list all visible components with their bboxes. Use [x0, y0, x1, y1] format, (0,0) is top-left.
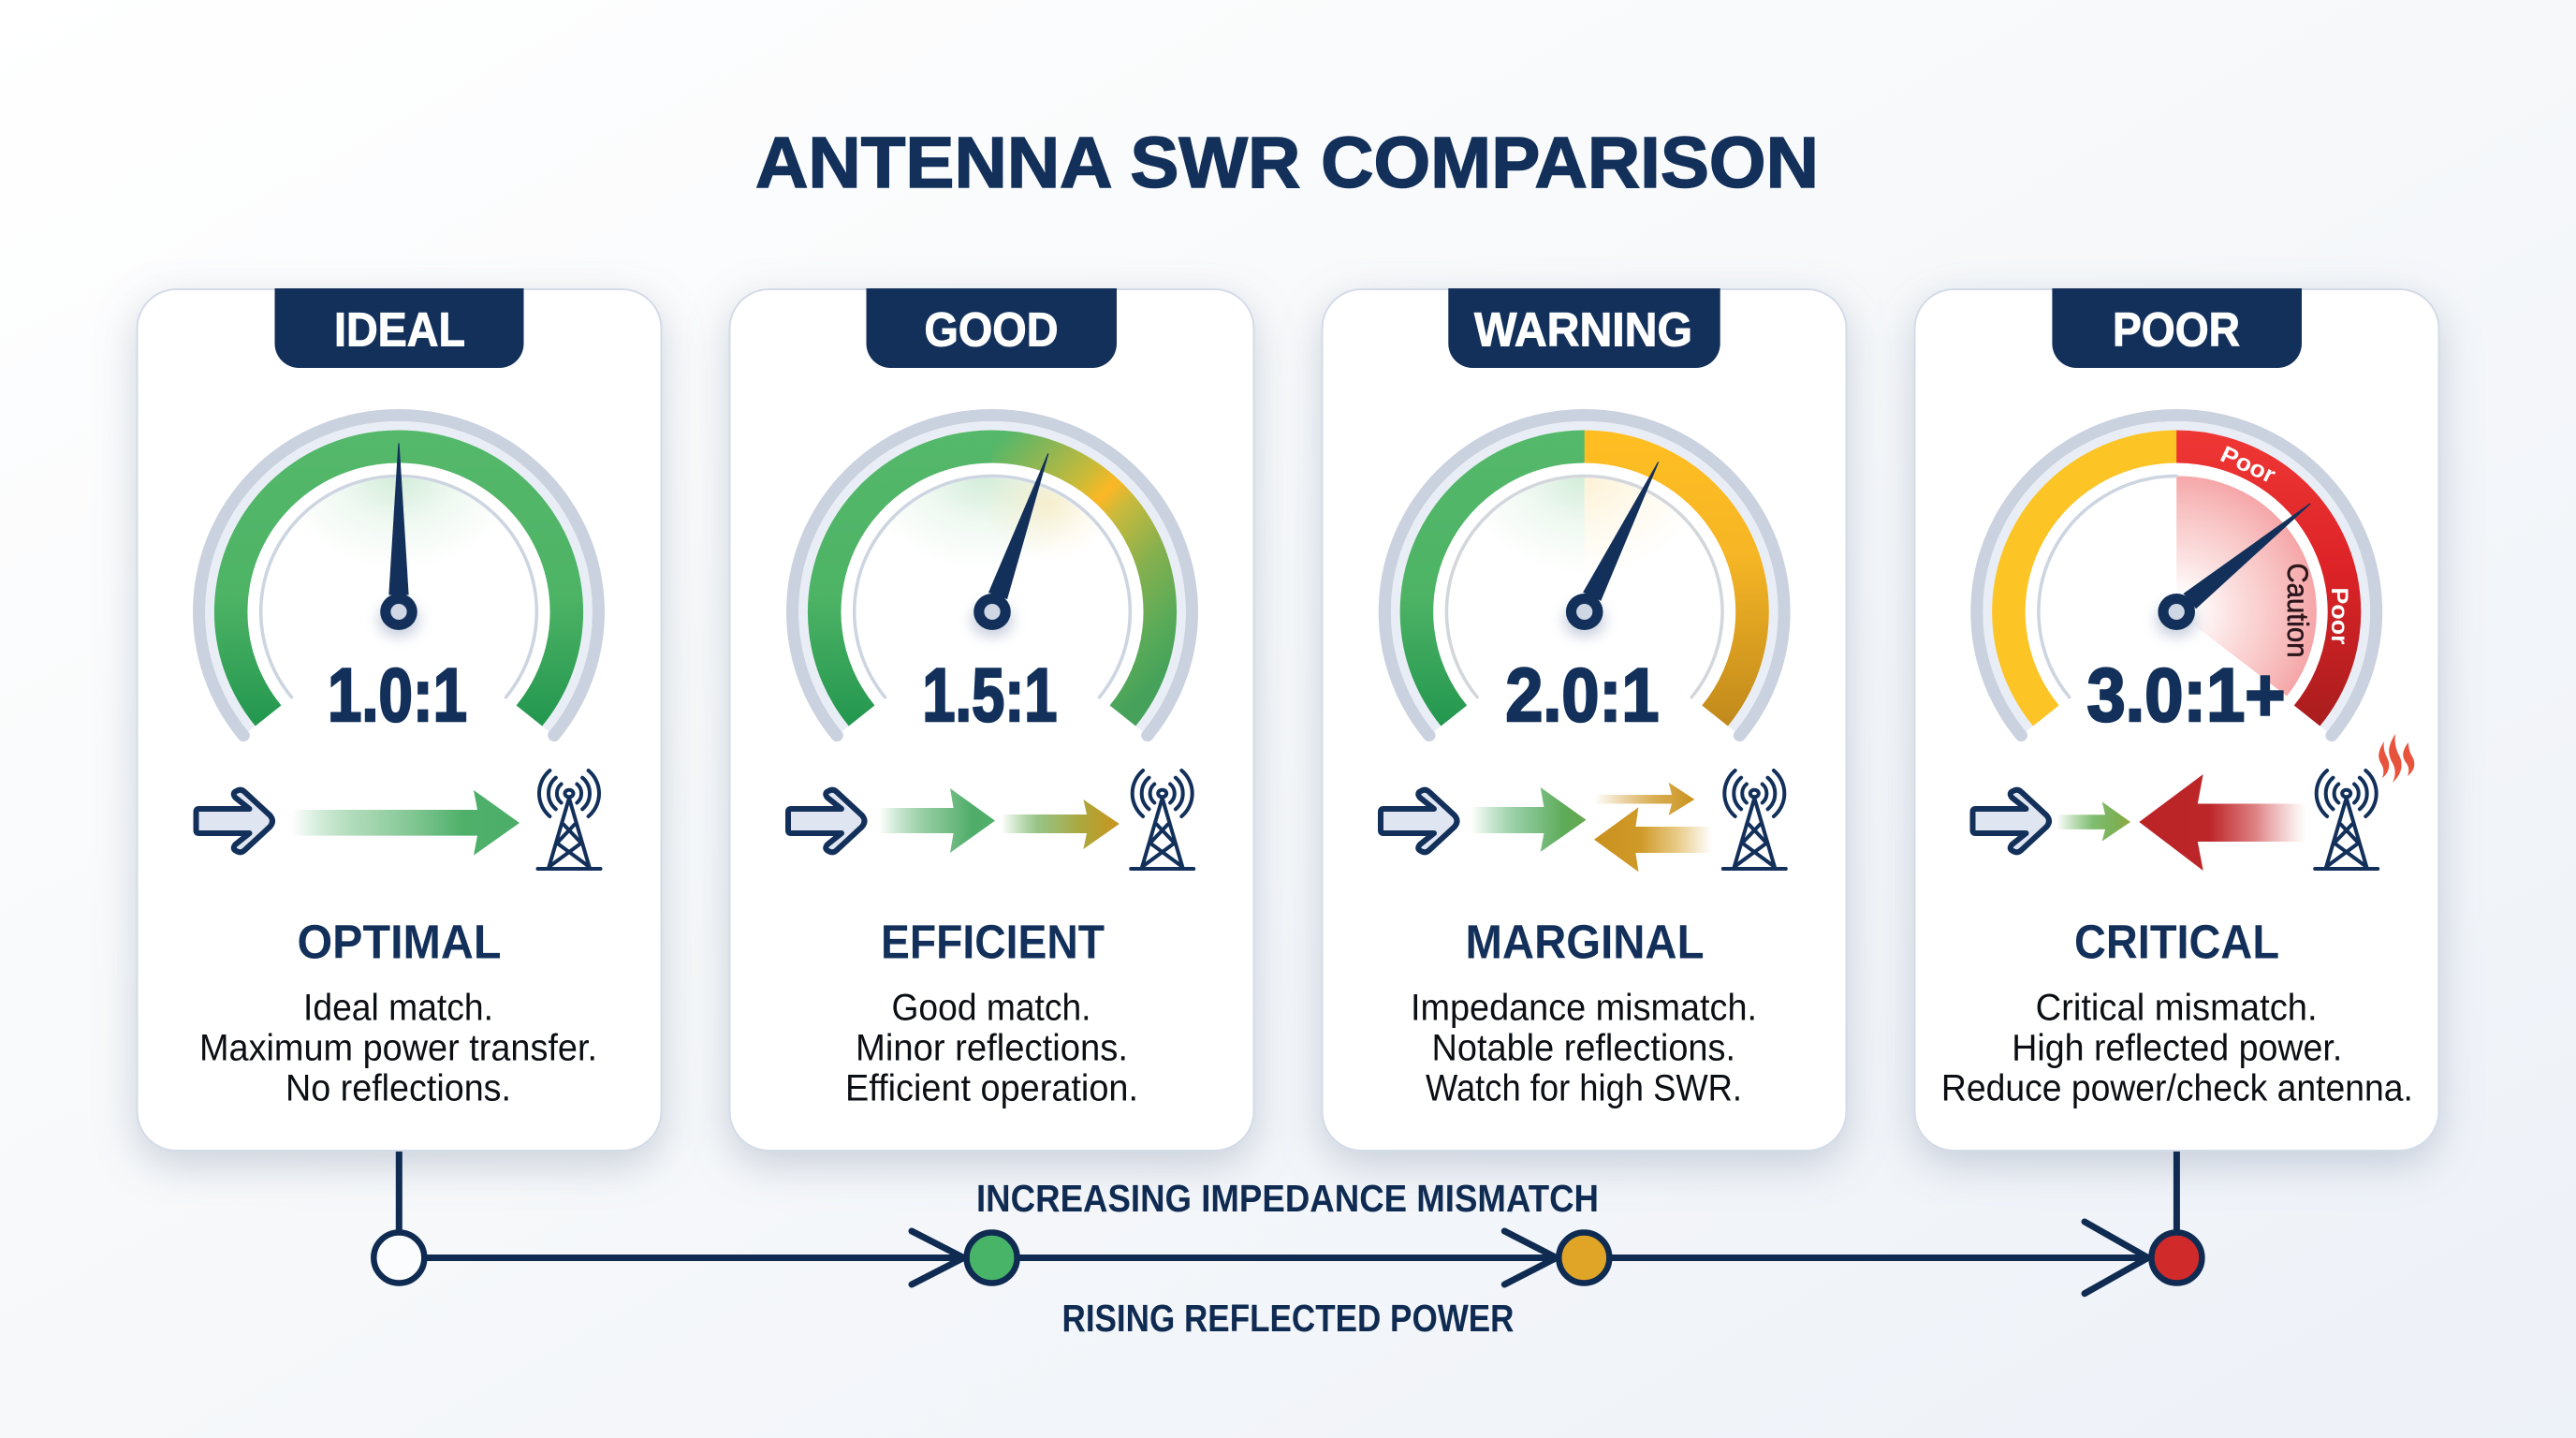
heading: critical: CRITICAL	[2074, 915, 2279, 968]
card background	[730, 289, 1254, 1151]
node: red	[2151, 1232, 2202, 1283]
title: ANTENNA SWR COMPARISON	[755, 123, 1819, 203]
description: optimal	[199, 987, 597, 1109]
arrow: reduced forward power	[1002, 800, 1120, 849]
gauge: 3.0:1+	[1977, 415, 2377, 736]
badge: warning: WARNING	[1474, 302, 1692, 356]
description: efficient: Good match.	[891, 987, 1091, 1028]
badge: good	[867, 288, 1117, 368]
node: start	[373, 1232, 424, 1283]
heading: optimal: OPTIMAL	[298, 915, 502, 968]
gauge: 2.0:1	[1384, 378, 1784, 736]
gauge: 1.5:1	[793, 382, 1192, 736]
description: marginal: Watch for high SWR.	[1426, 1068, 1742, 1109]
description: efficient: Efficient operation.	[845, 1068, 1138, 1109]
badge: good: GOOD	[925, 302, 1058, 356]
description: marginal	[1411, 987, 1757, 1109]
arrow: transmitted power	[1594, 783, 1694, 815]
badge: ideal: IDEAL	[334, 302, 465, 356]
arrow: forward power	[292, 790, 520, 856]
badge: ideal	[275, 288, 524, 368]
heading: marginal: MARGINAL	[1466, 915, 1704, 968]
zone label: caution: Caution	[2281, 564, 2314, 657]
card background	[1322, 289, 1846, 1151]
band label: poor right: Poor	[2326, 588, 2352, 645]
panel: good	[730, 288, 1254, 1151]
icon: input arrow	[788, 790, 865, 852]
arrow: small forward power	[2056, 801, 2130, 841]
gauge: 1.0:1	[199, 382, 598, 736]
arrow: forward power	[879, 788, 995, 853]
description: efficient	[845, 987, 1138, 1109]
description: critical: High reflected power.	[2012, 1027, 2342, 1068]
value: 3.0:1+: 3.0:1+	[2087, 653, 2286, 738]
arrow: large reflected power	[2139, 774, 2306, 871]
connector lines	[399, 1152, 2176, 1258]
node: amber	[1559, 1232, 1609, 1283]
icon: antenna tower	[1723, 770, 1786, 869]
description: optimal: No reflections.	[285, 1068, 511, 1109]
badge: poor	[2052, 288, 2302, 368]
panel: warning	[1322, 288, 1846, 1151]
arrowhead: to red	[2085, 1222, 2148, 1294]
band label: poor top: Poor	[2217, 441, 2279, 489]
icon: antenna tower	[1131, 770, 1193, 869]
arrow: reflected power	[1594, 807, 1712, 872]
node: green	[967, 1232, 1017, 1283]
icon: heat waves	[2378, 734, 2414, 783]
panel: ideal	[137, 288, 661, 1151]
value: 2.0:1: 2.0:1	[1505, 653, 1659, 738]
description: efficient: Minor reflections.	[856, 1027, 1128, 1068]
arrow: forward power	[1471, 787, 1586, 852]
description: marginal: Notable reflections.	[1432, 1027, 1735, 1068]
icon: input arrow	[1973, 790, 2049, 852]
timeline: increasing mismatch scale	[373, 1152, 2202, 1340]
arrowhead: to green	[912, 1231, 964, 1284]
description: optimal: Maximum power transfer.	[199, 1027, 597, 1068]
panel: poor	[1915, 288, 2439, 1151]
description: critical	[1941, 987, 2413, 1109]
value: 1.0:1: 1.0:1	[328, 653, 467, 738]
value: 1.5:1: 1.5:1	[922, 653, 1057, 738]
badge: warning	[1448, 288, 1720, 368]
card background	[137, 289, 661, 1151]
icon: antenna tower	[537, 770, 601, 869]
heading: efficient: EFFICIENT	[881, 915, 1105, 968]
badge: poor: POOR	[2113, 302, 2240, 356]
card background	[1915, 289, 2439, 1151]
description: critical: Reduce power/check antenna.	[1941, 1068, 2413, 1109]
arrowhead: to amber	[1504, 1231, 1557, 1284]
description: critical: Critical mismatch.	[2036, 987, 2318, 1028]
label: rising reflected power: RISING REFLECTED POWER	[1061, 1297, 1515, 1340]
label: increasing impedance mismatch: INCREASING IMPEDANCE MISMATCH	[976, 1177, 1599, 1220]
icon: antenna tower	[2315, 770, 2378, 869]
icon: input arrow	[1381, 790, 1456, 852]
icon: input arrow	[197, 790, 272, 852]
description: marginal: Impedance mismatch.	[1411, 987, 1757, 1028]
description: optimal: Ideal match.	[303, 987, 493, 1028]
